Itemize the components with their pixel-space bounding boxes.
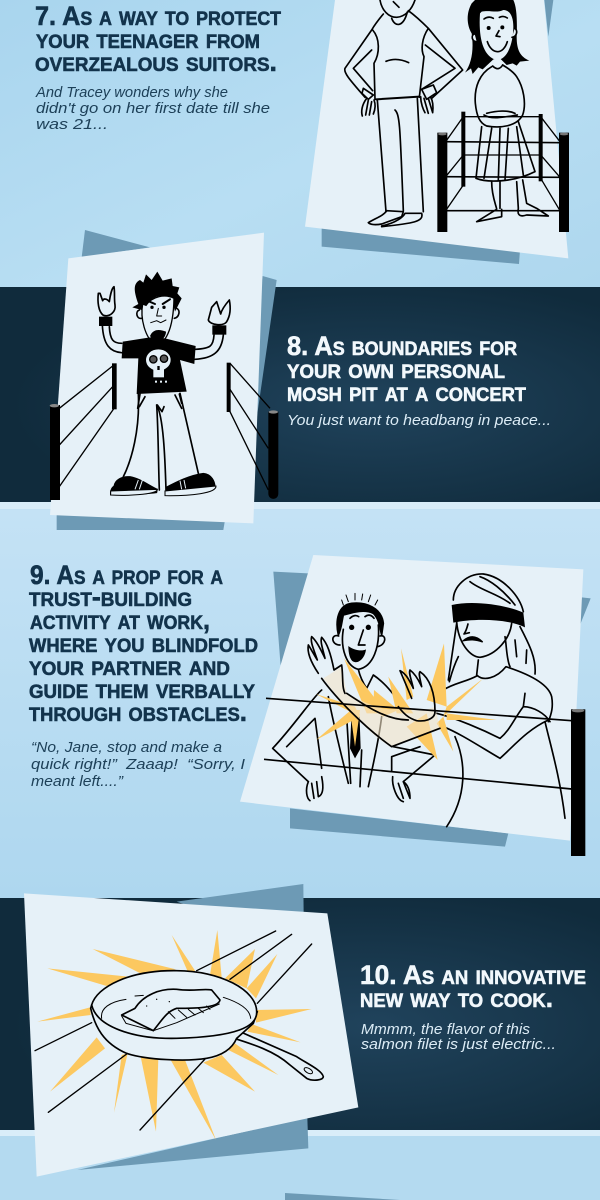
illustration: tip 9, trust exercise with shock xyxy=(240,555,591,856)
heading: tip 9: trust-building xyxy=(29,582,192,612)
figure: metalhead xyxy=(98,272,230,496)
heading: tip 8: mosh pit at a concert xyxy=(287,377,526,407)
frying pan xyxy=(91,971,323,1080)
necktie xyxy=(350,710,361,758)
fence: post and wires xyxy=(264,698,585,856)
heading: tip 9: where you blindfold xyxy=(29,628,258,658)
paper shadow xyxy=(322,0,553,264)
electric wires xyxy=(35,931,312,1130)
text: tip 9 caption: quick right!” Zaaap! “Sorry, I xyxy=(31,756,245,773)
text: tip 7 caption: didn't go on her first date till she xyxy=(36,100,270,117)
panel: tip 8 heading and text xyxy=(287,331,551,429)
text: tip 10 caption: Mmmm, the flavor of this xyxy=(361,1021,531,1038)
heading: tip 7: your teenager from xyxy=(36,24,260,54)
overlapping arms and hands xyxy=(308,637,440,747)
text: tip 10 caption: salmon filet is just electric... xyxy=(361,1036,556,1053)
paper shadow xyxy=(273,572,591,847)
paper shadow xyxy=(77,884,308,1170)
illustration: tip 7, man, woman and fence xyxy=(305,0,569,264)
dark band: section eight xyxy=(0,287,600,509)
heading: tip 10: new way to cook. xyxy=(360,983,553,1013)
figure: man xyxy=(345,0,463,227)
figure: man in suit xyxy=(273,593,435,802)
background: section nine xyxy=(0,509,600,898)
illustration: tip 8, metal fan with fence xyxy=(50,230,278,530)
heading: tip 9 xyxy=(29,560,258,727)
heading: tip 10: 10. As an innovative xyxy=(360,960,586,990)
text: tip 7 caption: And Tracey wonders why she xyxy=(35,84,228,101)
panel: tip 7 heading and text xyxy=(35,1,281,133)
heading: tip 10 xyxy=(360,960,586,1013)
illustration: tip 10, electrified pan with salmon xyxy=(24,884,358,1177)
heading: tip 7: 7. As a way to protect xyxy=(35,1,281,31)
mouth xyxy=(348,646,366,662)
text: tip 7 caption xyxy=(35,84,270,133)
figure: woman xyxy=(465,0,548,222)
blindfold xyxy=(452,603,525,627)
spark burst xyxy=(37,930,312,1140)
heading: tip 9: guide them verbally xyxy=(29,674,255,704)
dark band: section ten xyxy=(0,898,600,1136)
text: tip 9 caption: meant left....” xyxy=(31,773,124,790)
fence: left ropes xyxy=(50,363,117,500)
figure: blindfolded woman xyxy=(437,574,565,827)
paper sheet xyxy=(50,233,264,523)
text: tip 10 caption xyxy=(361,1021,556,1053)
heading: tip 8: your own personal xyxy=(287,354,505,384)
heading: tip 7: overzealous suitors. xyxy=(35,47,277,77)
fence: right ropes xyxy=(227,363,278,499)
text: tip 8 caption: You just want to headbang in peace... xyxy=(287,412,551,429)
heading: tip 8 xyxy=(287,331,526,407)
text: tip 9 caption xyxy=(31,739,245,790)
panel: tip 9 heading and text xyxy=(29,560,258,790)
background: bottom section xyxy=(0,1136,600,1200)
background: top section xyxy=(0,0,600,287)
heading: tip 9: activity at work, xyxy=(30,605,210,635)
next paper shadow at page edge xyxy=(285,1193,400,1200)
heading: tip 8: 8. As boundaries for xyxy=(287,331,517,361)
salmon filet xyxy=(122,989,220,1031)
paper sheet xyxy=(305,0,568,258)
heading: tip 9: through obstacles. xyxy=(29,697,247,727)
spark burst xyxy=(316,643,497,760)
paper sheet xyxy=(240,555,583,841)
heading: tip 9: your partner and xyxy=(29,651,230,681)
heading: tip 9: 9. As a prop for a xyxy=(30,560,223,590)
paper shadow xyxy=(57,230,277,530)
panel: tip 10 heading and text xyxy=(360,960,586,1053)
text: tip 9 caption: “No, Jane, stop and make a xyxy=(31,739,222,756)
heading: tip 7 xyxy=(35,1,281,77)
paper sheet xyxy=(24,893,358,1177)
fence: boxing ring around woman xyxy=(437,112,569,232)
text: tip 7 caption: was 21... xyxy=(36,116,108,133)
